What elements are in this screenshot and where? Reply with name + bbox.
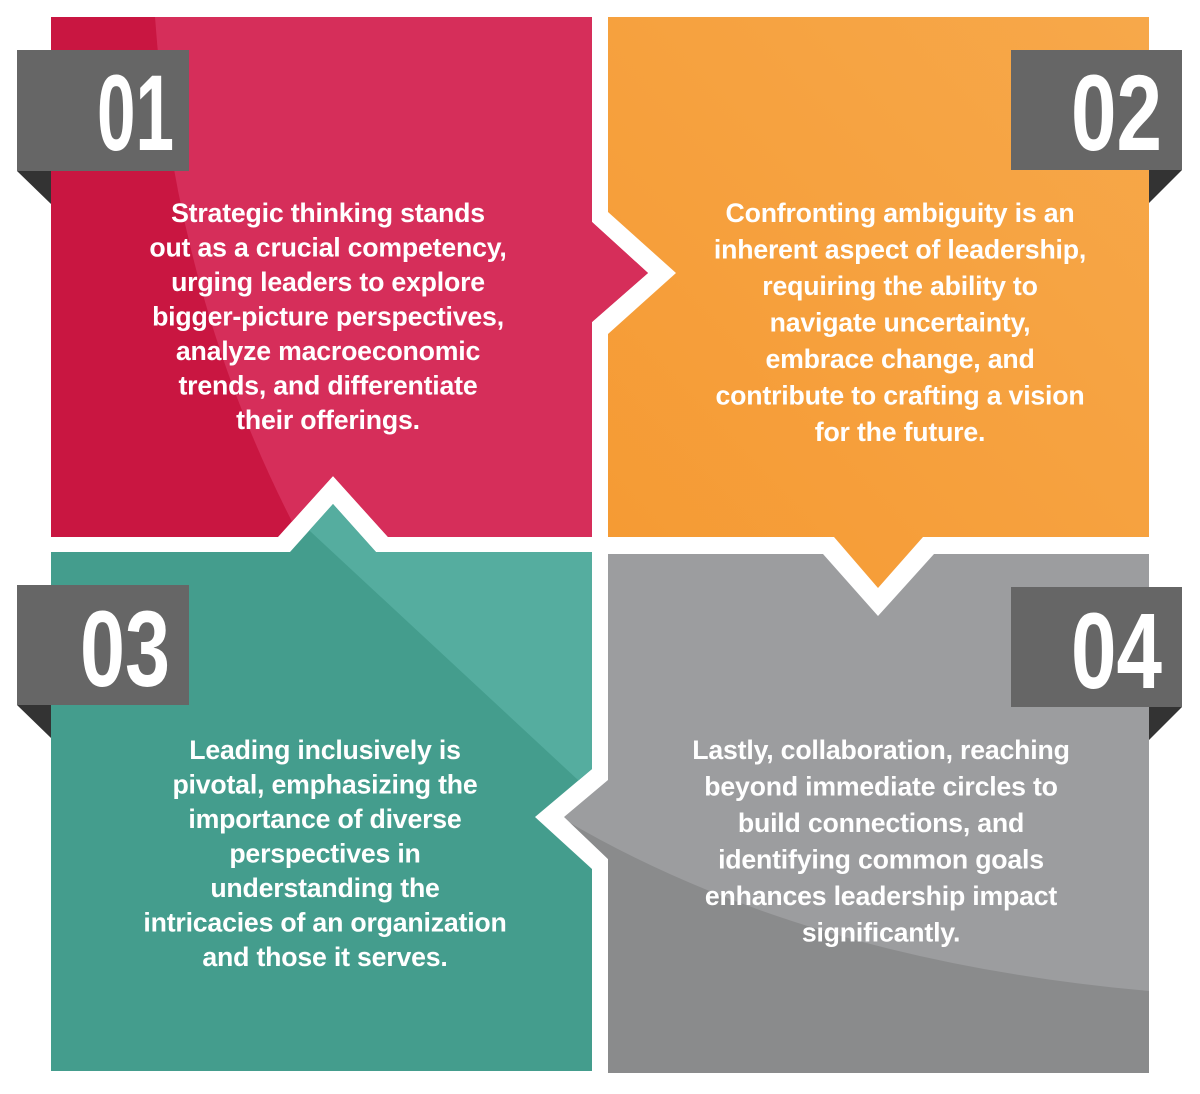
text 01: analyze macroeconomic	[176, 336, 481, 366]
text 03: pivotal, emphasizing the	[172, 770, 478, 800]
panel 01: strategic thinking	[51, 17, 700, 537]
text 03: understanding the	[210, 873, 440, 903]
panel 04: collaboration	[560, 554, 1149, 1080]
text 02: embrace change, and	[765, 344, 1035, 374]
text 04: identifying common goals	[718, 844, 1044, 874]
text 02: contribute to crafting a vision	[716, 380, 1084, 410]
text 01: bigger-picture perspectives,	[152, 302, 504, 332]
text 04: enhances leadership impact	[705, 881, 1057, 911]
panel 02: confronting ambiguity	[608, 17, 1149, 588]
number badge 04: 04	[1071, 590, 1162, 711]
text 01: Strategic thinking stands	[171, 198, 485, 228]
text 02: inherent aspect of leadership,	[714, 234, 1086, 264]
text 03: and those it serves.	[202, 942, 448, 972]
number badge 03	[17, 585, 189, 738]
text 03: intricacies of an organization	[143, 908, 507, 938]
text 01: their offerings.	[236, 405, 420, 435]
number badge 04	[1011, 587, 1182, 740]
panel 03: leading inclusively	[51, 504, 592, 1071]
text 04: Lastly, collaboration, reaching	[692, 735, 1070, 765]
text 03: importance of diverse	[188, 804, 462, 834]
text 01: out as a crucial competency,	[149, 232, 507, 262]
number badge 02: 02	[1071, 52, 1162, 173]
text 02: requiring the ability to	[762, 271, 1038, 301]
number badge 01	[17, 50, 189, 204]
text 02: Confronting ambiguity is an	[726, 198, 1074, 228]
number badge 03: 03	[80, 588, 170, 709]
text 04: build connections, and	[738, 808, 1024, 838]
text 01: trends, and differentiate	[178, 370, 478, 400]
text 04: beyond immediate circles to	[704, 772, 1058, 802]
text 04: significantly.	[802, 918, 960, 948]
text 03: perspectives in	[229, 838, 421, 868]
text 01: urging leaders to explore	[171, 267, 485, 297]
text 02: navigate uncertainty,	[770, 308, 1030, 338]
number badge 02	[1011, 50, 1182, 203]
number badge 01: 01	[97, 52, 174, 173]
text 02: for the future.	[815, 417, 985, 447]
text 03: Leading inclusively is	[189, 735, 461, 765]
